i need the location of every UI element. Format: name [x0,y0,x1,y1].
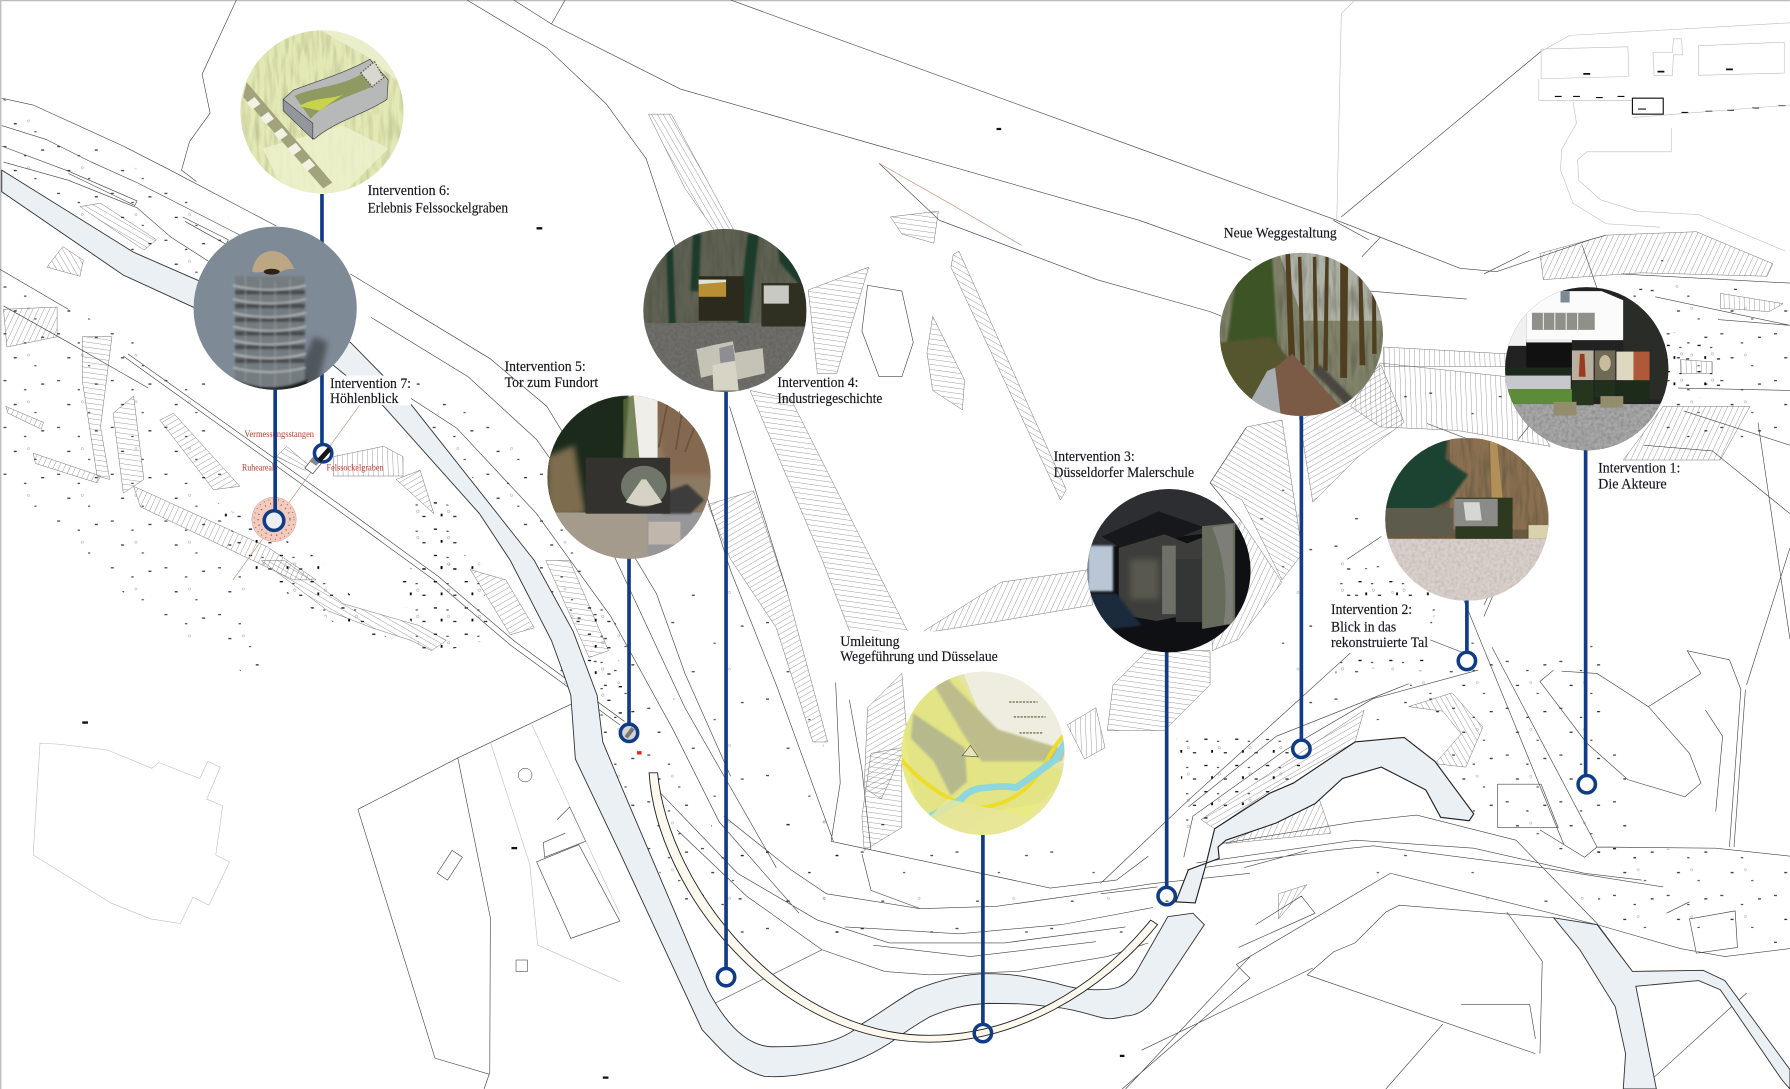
label: Intervention 3: Intervention 3: [1054,449,1135,465]
photo circle: Intervention 4 display boards [643,228,807,394]
photo circle: Intervention 5 gate [547,395,714,559]
label: Intervention 2: Intervention 2: [1331,602,1412,618]
label: Intervention 4: Intervention 4: [777,375,858,391]
label: Intervention 1 [1598,461,1680,493]
label: Intervention 6: Erlebnis Felssockelgraben [368,200,508,216]
ring: Intervention 7 [264,511,284,530]
photo circle: Umleitung sketch plan [901,667,1069,839]
connector: Intervention 6 [320,194,324,454]
label: Intervention 3: Düsseldorfer Malerschule [1054,465,1194,481]
connector: Intervention 4 [724,390,728,969]
photo circle: Intervention 1 house and posters [1505,287,1669,452]
ring: Intervention 4 [717,968,735,986]
photo circle: Intervention 2 board in clearing [1385,438,1549,600]
photo circle: Intervention 6 sketch [240,30,404,194]
ring: Neue Weggestaltung [1293,740,1310,758]
map annotations in red: Vermessungsstangen [244,429,314,439]
label: Intervention 5: Tor zum Fundort [505,375,598,391]
connector: Umleitung [981,833,984,1025]
map: red survey line [233,163,1022,580]
connector: Intervention 5 [627,556,631,725]
ring: Intervention 2 [1458,652,1476,670]
ring: Intervention 3 [1158,887,1175,905]
label: Intervention 3 [1054,449,1194,481]
label: Intervention 1: Intervention 1: [1598,461,1680,477]
label: Umleitung [840,634,998,665]
label: Intervention 4 [777,375,882,407]
label: Umleitung: Wegeführung und Düsselaue [840,649,998,665]
map: small building and plots [516,98,1663,971]
connector: Intervention 1 [1584,450,1587,776]
ring: Intervention 1 [1578,776,1595,793]
photo circle: Intervention 7 tower with skull [193,226,357,390]
connector: Intervention 3 [1165,650,1168,888]
label: Intervention 6: Intervention 6: [368,183,450,199]
connector: Neue Weggestaltung [1300,416,1303,741]
label: Intervention 2: rekonstruierte Tal [1331,635,1428,651]
ring: Intervention 6 [314,445,332,462]
map: hatched slopes [3,114,1783,919]
river upper bend loop [1176,737,1474,903]
red marker near Tor zum Fundort [637,751,642,755]
endpoint rings [264,445,1595,1042]
label: Intervention 5 [505,359,598,391]
white label backgrounds [329,376,1683,667]
label: Neue Weggestaltung: Neue Weggestaltung [1224,225,1337,241]
label: Intervention 2: Blick in das [1331,619,1397,635]
river east branch [1554,918,1790,1089]
Felssockelgraben site marker [305,449,331,474]
ring: Intervention 5 [620,724,638,742]
connector lines [275,194,1586,1025]
map annotations in red: Felssockelgraben [327,462,384,472]
map annotations in red: Ruheareal [242,462,274,472]
label: Intervention 7: Intervention 7: [330,376,411,392]
label: Umleitung: Umleitung [840,634,900,650]
label: Intervention 7 [330,376,411,407]
connector: Intervention 7 [274,388,277,514]
label: Intervention 7: Höhlenblick [330,391,399,407]
map annotations in red [242,429,384,472]
label: Intervention 1: Die Akteure [1598,477,1667,493]
connector: Intervention 2 [1465,600,1468,653]
photo circle: Intervention 3 tunnel gallery [1087,489,1251,653]
photo circle: Neue Weggestaltung forest path [1219,252,1384,426]
Ruheareal marker: pink donut [252,497,296,542]
route: curved path Umleitung [649,773,1158,1042]
label: Intervention 6 [368,183,508,216]
river upper left to lower bend [2,170,1204,1077]
label: Intervention 5: Intervention 5: [505,359,586,375]
ring: Umleitung [974,1024,992,1042]
label: Intervention 2 [1331,602,1428,651]
label: Intervention 4: Industriegeschichte [777,391,882,407]
